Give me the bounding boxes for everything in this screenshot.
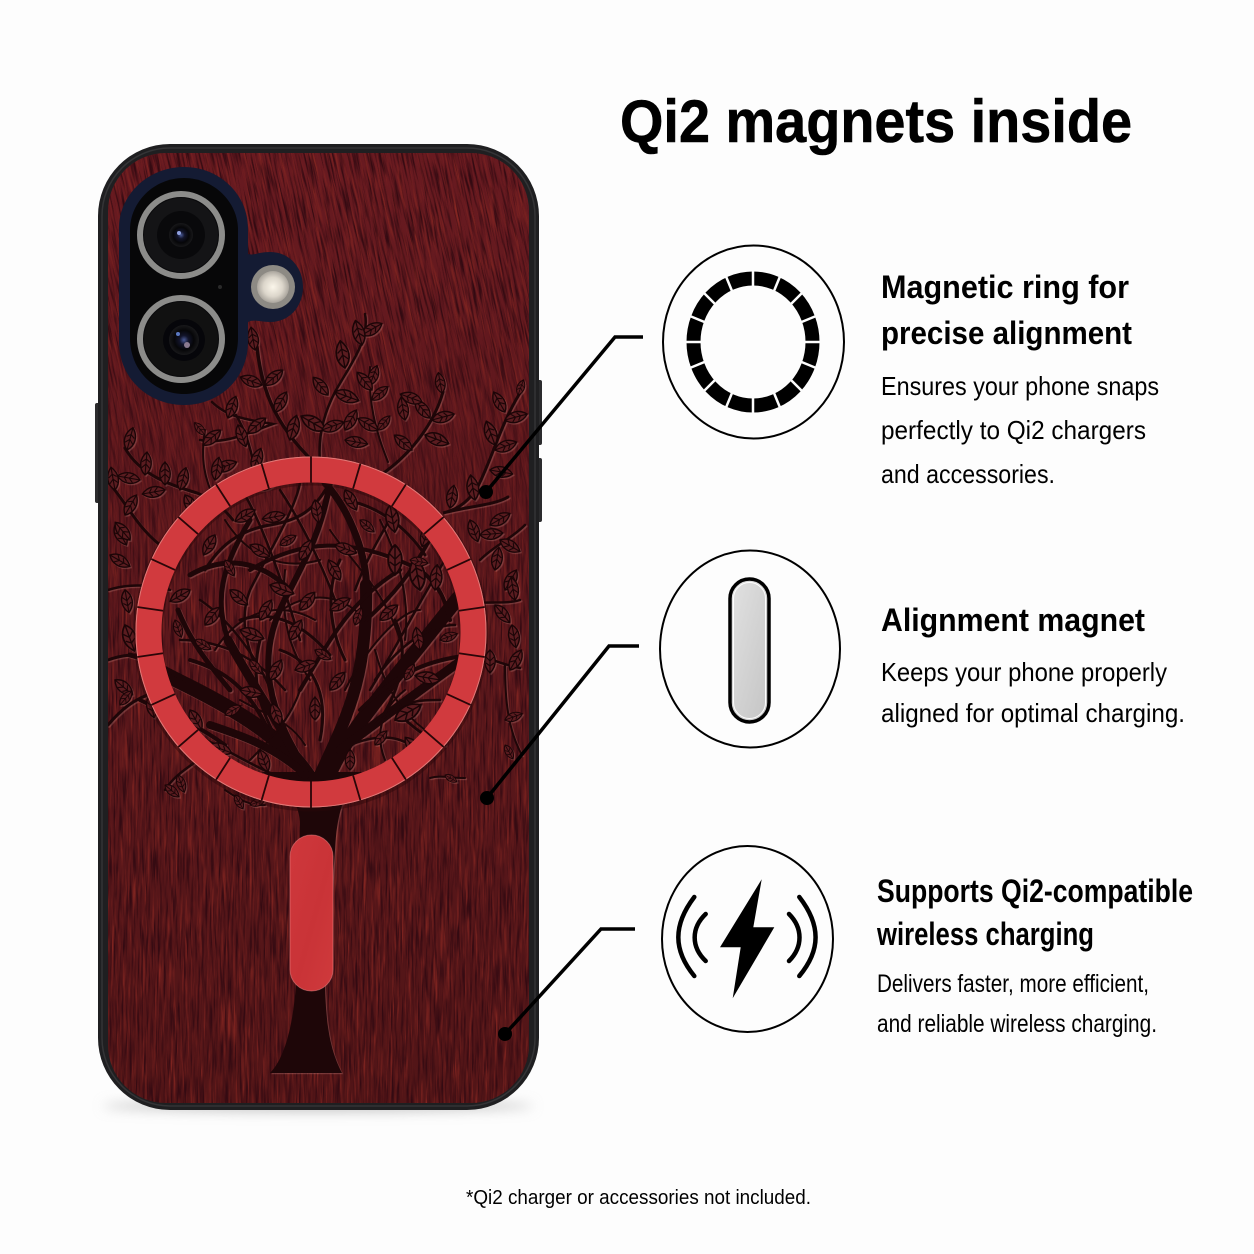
text block: alignment magnet [881,602,1185,728]
icon: alignment magnet [660,550,840,748]
icon: wireless charging [662,846,833,1032]
footnote: *Qi2 charger or accessories not included. [466,1187,811,1209]
microphone [218,285,222,289]
lens bottom [140,298,222,380]
callout: alignment magnet leader [480,646,639,805]
description: Delivers faster, more efficient, [877,970,1149,998]
camera black plate [130,178,238,394]
description: Ensures your phone snaps [881,371,1159,401]
text block: wireless charging [876,873,1193,1038]
description [881,657,1185,728]
heading: wireless charging [876,916,1094,952]
leaves inside ring [167,487,459,774]
tree trunk [262,772,362,1073]
description: Keeps your phone properly [881,657,1167,687]
limbs [108,314,525,805]
lightning bolt [720,879,774,998]
camera module [119,167,303,405]
outer upper branches [256,346,310,456]
lens top [140,194,222,276]
flash [251,265,295,309]
heading: Magnetic ring for [881,269,1129,305]
text block: magnetic ring [881,269,1159,489]
heading: precise alignment [881,315,1132,351]
heading: Alignment magnet [881,602,1145,638]
magnetic ring [136,456,486,808]
fine inner branches [205,482,330,570]
charging waves [678,897,816,976]
description: aligned for optimal charging. [881,698,1185,728]
heading: Supports Qi2-compatible [877,873,1193,909]
callout: magnetic ring leader [479,337,643,499]
description [877,970,1157,1038]
heading [881,269,1132,351]
title: Qi2 magnets inside [620,88,1132,155]
callout: wireless charging leader [498,929,635,1041]
description: perfectly to Qi2 chargers [881,415,1146,445]
engraved tree [106,314,529,1073]
case bumper [98,144,539,1110]
side buttons [95,380,542,522]
heading [876,873,1193,952]
alignment magnet pill [290,835,333,991]
camera housing [119,167,303,405]
description: and accessories. [881,459,1055,489]
wood back [108,153,529,1103]
description [881,371,1159,489]
phone case [95,144,542,1118]
icon: magnetic ring [663,246,844,438]
leaves outer [106,319,529,811]
phone shadow [103,1101,533,1111]
description: and reliable wireless charging. [877,1010,1157,1038]
